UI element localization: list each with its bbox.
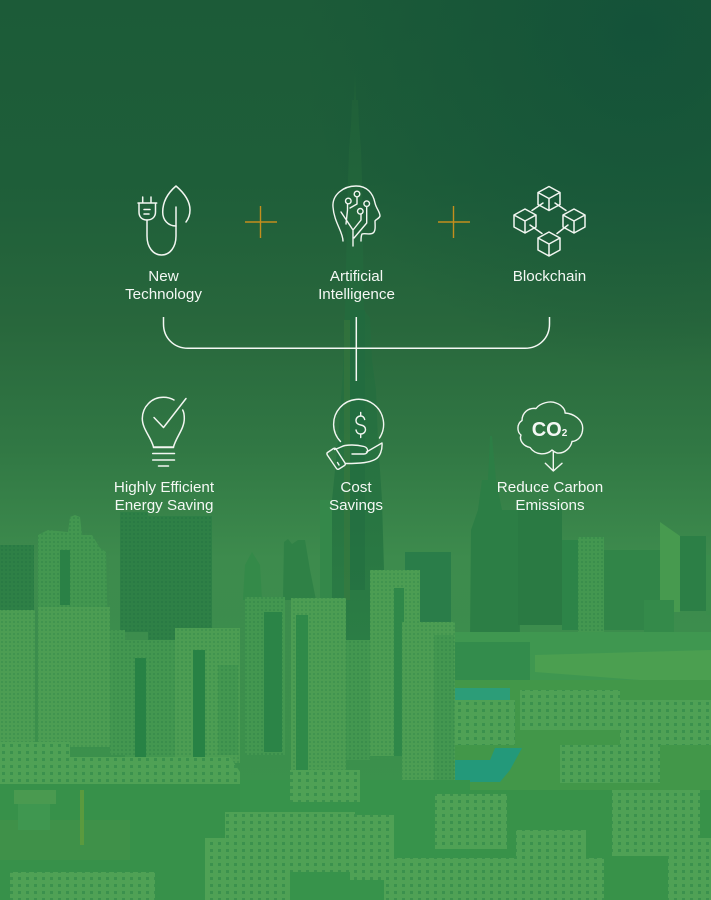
mid-rise towers right	[370, 570, 455, 797]
icon: CO2 cloud with down arrow	[518, 402, 583, 471]
label: Reduce Carbon Emissions: Emissions	[515, 497, 585, 514]
icon: blockchain cubes	[514, 186, 585, 256]
label: Cost Savings: Savings	[329, 497, 383, 514]
icon: CO2 cloud with down arrow: CO2	[532, 419, 568, 441]
label: New Technology: Technology	[125, 286, 202, 303]
label: Artificial Intelligence: Artificial	[330, 268, 383, 285]
icon: hand holding coin	[327, 399, 384, 469]
label: Reduce Carbon Emissions: Reduce Carbon	[497, 479, 603, 496]
label: New Technology: New	[148, 268, 179, 285]
foreground buildings	[10, 770, 711, 900]
label: Highly Efficient Energy Saving: Energy Saving	[115, 497, 213, 514]
far towers right	[405, 436, 711, 640]
label: Blockchain: Blockchain	[513, 268, 586, 285]
water	[455, 688, 522, 782]
icon: light bulb with check	[142, 397, 186, 466]
plus sign 2	[438, 206, 470, 238]
Burj tower	[330, 72, 386, 640]
plus sign 1	[245, 206, 277, 238]
label: Highly Efficient Energy Saving: Highly Efficient	[114, 479, 215, 496]
far towers left	[120, 500, 332, 641]
label: Cost Savings: Cost	[340, 479, 372, 496]
icon: plug and leaf	[138, 186, 190, 255]
bracket connector	[164, 317, 550, 381]
label: Artificial Intelligence: Intelligence	[318, 286, 395, 303]
mall and district right	[455, 632, 711, 800]
mid-rise towers left	[0, 515, 370, 778]
icon: AI head	[333, 186, 380, 246]
podium and low-rise left	[0, 742, 240, 900]
